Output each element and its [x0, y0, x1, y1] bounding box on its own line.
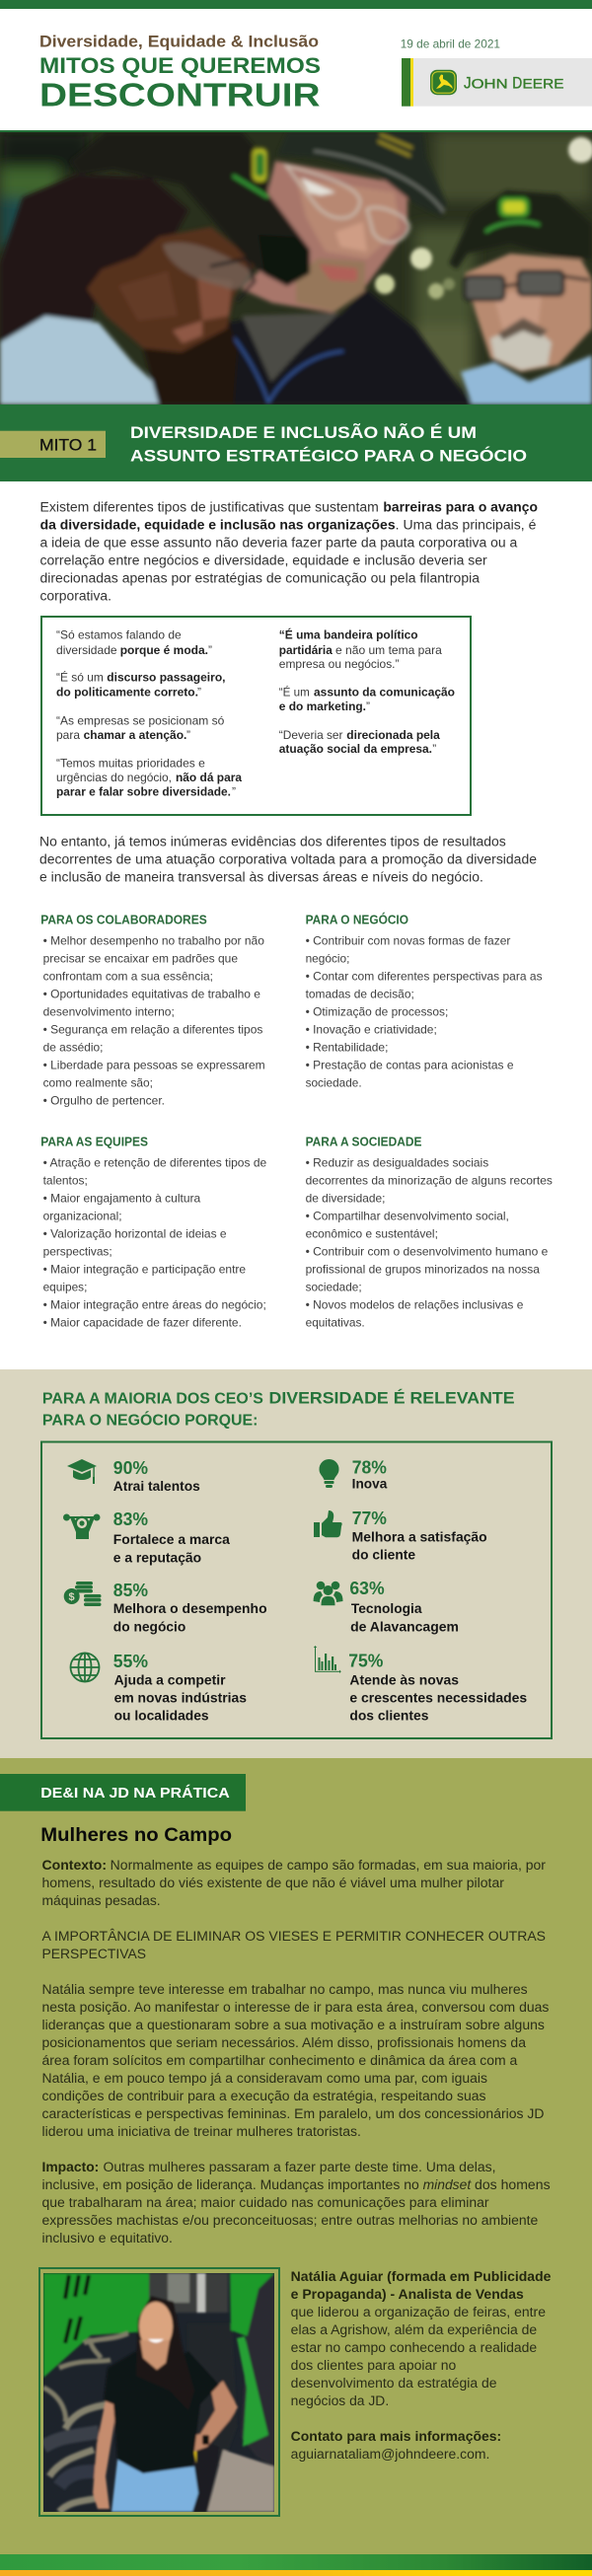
list: para as equipes: • Maior engajamento à cultura	[43, 1192, 201, 1206]
list: para as equipes: • Valorização horizontal de ideias e	[43, 1227, 227, 1241]
black polo	[104, 2351, 219, 2473]
list: para os colaboradores: como realmente são;	[43, 1076, 153, 1090]
story paragraph: posicionamentos que seriam necessários. Além disso, profissionais homens da	[41, 2035, 526, 2050]
intro paragraph: da diversidade, equidade e inclusão nas organizações	[40, 517, 396, 532]
stat: 75% necessidades: dos clientes	[349, 1708, 428, 1723]
subheading	[41, 1929, 546, 1961]
panel: DE&I in practice	[0, 1758, 592, 2554]
list: para a sociedade: equitativas.	[306, 1316, 365, 1330]
stat: 55% competir: ou localidades	[114, 1708, 209, 1723]
list: para o negócio: tomadas de decisão;	[306, 988, 414, 1001]
list: para os colaboradores: confrontam com a sua essência;	[43, 970, 213, 984]
subheading: A IMPORTÂNCIA DE ELIMINAR OS VIESES E PERMITIR CONHECER OUTRAS	[41, 1929, 546, 1944]
stat: 55% competir: Ajuda a competir	[114, 1672, 226, 1687]
profile text: dos clientes para apoiar no	[291, 2358, 456, 2373]
list: para o negócio: • Rentabilidade;	[306, 1041, 388, 1055]
list: para as equipes	[40, 1136, 267, 1330]
header title block	[39, 34, 321, 113]
man in centre: cap	[277, 132, 447, 217]
left arm	[93, 2400, 117, 2509]
impact paragraph: expressões machistas e/ou preconceituosas; entre outras melhorias no ambiente	[41, 2213, 538, 2228]
hair	[136, 2296, 194, 2410]
subheading: PERSPECTIVAS	[41, 1947, 146, 1961]
safety glasses	[286, 166, 409, 243]
quotes column 2: direcionada pela	[346, 728, 440, 742]
quotes column 1: “Só estamos falando de	[56, 628, 182, 642]
section heading: DIVERSIDADE É RELEVANTE	[268, 1388, 515, 1407]
profile text: estar no campo conhecendo a realidade	[291, 2340, 537, 2355]
stat: 83% marca: e a reputação	[113, 1550, 201, 1565]
context paragraph: Contexto:	[41, 1858, 107, 1873]
icon: globe	[71, 1654, 99, 1681]
list: para a sociedade: • Compartilhar desenvolvimento social,	[306, 1210, 509, 1223]
myth number tab	[0, 431, 106, 458]
story paragraph: características e perspectivas femininas. Em paralelo, um dos concessionários JD	[41, 2106, 545, 2121]
stat: 55% competir: em novas indústrias	[114, 1690, 247, 1705]
quotes box	[41, 617, 471, 815]
quotes column 1: ”	[186, 728, 190, 742]
profile text: desenvolvimento da estratégia de	[291, 2376, 497, 2391]
list: para o negócio: sociedade.	[306, 1076, 362, 1090]
stat: 63% tecnologia: 63%	[349, 1579, 385, 1598]
list: para o negócio: negócio;	[306, 952, 349, 966]
myth heading	[130, 422, 527, 465]
list: para o negócio: • Otimização de processos;	[306, 1005, 448, 1019]
header divider	[0, 130, 592, 132]
floor	[207, 2450, 274, 2512]
quotes column 1: não dá para	[176, 771, 242, 784]
icon: leaping deer shield	[430, 70, 457, 95]
yellow strip	[191, 2450, 199, 2465]
list: para os colaboradores: • Orgulho de pertencer.	[43, 1094, 165, 1108]
date: 19 de abril de 2021	[401, 37, 500, 50]
list: para o negócio: • Contribuir com novas formas de fazer	[306, 934, 510, 948]
list: para as equipes: equipes;	[43, 1281, 87, 1294]
list: para a sociedade: econômico e sustentável;	[306, 1227, 438, 1241]
header kicker: Diversidade, Equidade & Inclusão	[39, 34, 319, 51]
quotes column 2: ”	[432, 742, 436, 756]
icon: thumbs up	[314, 1510, 342, 1537]
icon: coins: $	[69, 1591, 75, 1603]
quotes column 2: assunto da comunicação	[314, 686, 455, 699]
green ladder	[237, 2336, 268, 2447]
left tire treads	[43, 2333, 128, 2422]
tractor hood	[43, 2273, 149, 2378]
story paragraph: condições de contribuir para a execução da estratégia, respeitando suas	[41, 2089, 486, 2103]
stat: 77% satisfacao	[314, 1509, 487, 1562]
stat: 90% atrai talentos: Atrai talentos	[113, 1479, 200, 1494]
stat: 78% inova: Inova	[352, 1476, 388, 1491]
section heading: PARA A MAIORIA DOS CEO’S	[42, 1390, 263, 1407]
impact paragraph: mindset	[423, 2177, 472, 2192]
quotes column 1: discurso passageiro,	[107, 671, 225, 685]
stat: 85% desempenho: do negócio	[113, 1619, 185, 1634]
evidence paragraph: decorrentes de uma atuação corporativa voltada para a promoção da diversidade	[39, 852, 537, 867]
quotes column 1: “Temos muitas prioridades e	[56, 757, 205, 771]
green title band	[0, 405, 592, 481]
list: para os colaboradores: • Melhor desempenho no trabalho por não	[43, 934, 264, 948]
myth heading: DIVERSIDADE E INCLUSÃO NÃO É UM	[130, 422, 477, 442]
main title line 2: DESCONTRUIR	[39, 77, 320, 113]
list: para a sociedade: de diversidade;	[306, 1192, 385, 1206]
section tab	[0, 1774, 246, 1811]
intro paragraph	[39, 499, 538, 603]
quotes column 1: “As empresas se posicionam só	[56, 714, 225, 728]
stat: 90% atrai talentos: 90%	[113, 1458, 148, 1478]
case heading: Mulheres no Campo	[40, 1825, 232, 1846]
list: para as equipes: • Atração e retenção de diferentes tipos de	[43, 1156, 267, 1170]
quotes column 2: “Deveria ser	[279, 728, 343, 742]
stat: 83% marca: Fortalece a marca	[113, 1532, 230, 1547]
stat: 85% desempenho	[64, 1581, 267, 1634]
icon: light bulb	[319, 1459, 339, 1488]
list: para a sociedade: • Contribuir com o desenvolvimento humano e	[306, 1245, 549, 1259]
icon: weightlifter	[63, 1513, 101, 1539]
list: para os colaboradores: de assédio;	[43, 1041, 103, 1055]
evidence paragraph: No entanto, já temos inúmeras evidências dos diferentes tipos de resultados	[39, 835, 506, 849]
context paragraph: Normalmente as equipes de campo são formadas, em sua maioria, por	[111, 1858, 547, 1873]
quotes column 1: ”	[197, 686, 201, 699]
story paragraph: nesta posição. Ao manifestar o interesse de ir para esta área, conversou com duas	[41, 2000, 550, 2015]
stats frame	[41, 1442, 552, 1738]
list: para as equipes: talentos;	[43, 1174, 88, 1188]
wordmark: OHN	[472, 76, 508, 91]
right tire	[241, 2273, 274, 2466]
face	[139, 2302, 173, 2351]
list: para o negócio: • Inovação e criatividade;	[306, 1023, 437, 1037]
list: para o negócio: PARA O NEGÓCIO	[306, 913, 408, 927]
main title line 1: MITOS QUE QUEREMOS	[39, 53, 321, 78]
context paragraph: homens, resultado do viés existente de que não é viável uma mulher pilotar	[41, 1876, 504, 1890]
stat: 55% competir: 55%	[113, 1652, 148, 1671]
list: para a sociedade: decorrentes da minorização de alguns recortes	[306, 1174, 553, 1188]
stat: 75% necessidades: 75%	[348, 1651, 383, 1670]
list: para o negócio: • Prestação de contas para acionistas e	[306, 1059, 514, 1072]
intro paragraph: Existem diferentes tipos de justificativas que sustentam	[39, 499, 379, 514]
stat: 83% marca	[63, 1509, 230, 1565]
man in centre: face	[242, 161, 407, 313]
profile text: que liderou a organização de feiras, entre	[291, 2305, 546, 2319]
section tab: DE&I NA JD NA PRÁTICA	[40, 1785, 230, 1802]
evidence paragraph: e inclusão de maneira transversal às diversas áreas e níveis do negócio.	[39, 870, 483, 885]
quotes column 1: chamar a atenção.	[84, 728, 186, 742]
woman: cap	[70, 132, 310, 286]
impact paragraph: Outras mulheres passaram a fazer parte deste time. Uma delas,	[103, 2160, 495, 2174]
story paragraph: área foram solícitos em compartilhar conhecimento e dinâmica da área com a	[41, 2053, 518, 2068]
profile text: Contato para mais informações:	[291, 2429, 501, 2444]
list: para os colaboradores: precisar se encaixar em padrões que	[43, 952, 238, 966]
stat: 77% satisfacao: 77%	[352, 1509, 387, 1528]
stat: 63% tecnologia	[314, 1579, 459, 1634]
right arm	[191, 2380, 239, 2453]
quotes column 1: diversidade	[56, 643, 117, 657]
footer bars	[0, 2554, 592, 2576]
context paragraph: máquinas pesadas.	[41, 1893, 161, 1908]
panel: CEO reasons	[0, 1369, 592, 1758]
man in centre: jacket	[227, 289, 472, 405]
woman: shirt	[0, 316, 178, 405]
stat: 90% atrai talentos	[67, 1458, 200, 1494]
list: para os colaboradores: • Liberdade para pessoas se expressarem	[43, 1059, 265, 1072]
wordmark: J	[464, 74, 472, 92]
quotes column 2: empresa ou negócios.”	[279, 657, 399, 671]
impact paragraph: que trabalharam na área; maior cuidado nas comunicações para eliminar	[41, 2195, 489, 2210]
icon: graduation cap	[67, 1459, 97, 1484]
list: para as equipes: organizacional;	[43, 1210, 122, 1223]
icon: bar chart	[314, 1646, 341, 1673]
right fender	[230, 2273, 274, 2336]
quotes column 2: “É um	[279, 685, 310, 699]
intro paragraph: a ideia de que esse assunto não deveria fazer parte da pauta corporativa ou a	[39, 535, 518, 550]
man at right: beard	[490, 323, 552, 370]
list: para a sociedade: PARA A SOCIEDADE	[306, 1136, 422, 1149]
man at right: face	[465, 254, 592, 372]
framed photo: Natália in front of tractor	[39, 2268, 279, 2516]
list: para as equipes: • Maior integração e participação entre	[43, 1263, 246, 1277]
impact paragraph: inclusivo e equitativo.	[41, 2231, 173, 2245]
list: para a sociedade	[306, 1136, 553, 1330]
intro paragraph: . Uma das principais, é	[396, 517, 536, 532]
stat: 77% satisfacao: do cliente	[352, 1547, 415, 1562]
profile text	[291, 2269, 552, 2462]
list: para os colaboradores: PARA OS COLABORADORES	[40, 914, 207, 927]
stat: 85% desempenho: Melhora o desempenho	[113, 1601, 267, 1616]
man at right: cap	[449, 190, 592, 269]
story paragraph: Natália, e em pouco tempo já a consideravam como uma par, com iguais	[41, 2071, 487, 2086]
stat: 63% tecnologia: de Alavancagem	[350, 1619, 459, 1634]
quotes column 1: ”	[208, 643, 212, 657]
list: para o negócio	[306, 913, 543, 1090]
story paragraph: liderou uma iniciativa de treinar mulheres tratoristas.	[41, 2124, 361, 2139]
stat: 78% inova	[319, 1457, 388, 1491]
quotes column 2	[279, 627, 455, 756]
stat: 77% satisfacao: Melhora a satisfação	[352, 1529, 487, 1544]
story paragraph: Natália sempre teve interesse em trabalhar no campo, mas nunca viu mulheres	[41, 1982, 528, 1997]
list: para a sociedade: • Novos modelos de relações inclusivas e	[306, 1298, 524, 1312]
list: para os colaboradores: • Oportunidades equitativas de trabalho e	[43, 988, 260, 1001]
quotes column 1: parar e falar sobre diversidade.	[56, 785, 231, 799]
icon: group of people	[314, 1582, 343, 1605]
cab	[149, 2273, 228, 2313]
wordmark: D	[512, 74, 522, 92]
impact paragraph: inclusive, em posição de liderança. Mudanças importantes no	[41, 2177, 419, 2192]
hero photo: three John Deere workers wearing caps	[0, 132, 592, 405]
stat: 78% inova: 78%	[352, 1457, 387, 1477]
man at right: glasses	[465, 271, 563, 300]
quotes column 1: urgências do negócio,	[56, 771, 172, 784]
intro paragraph: direcionadas apenas por estratégias de comunicação ou pela filantropia	[39, 570, 481, 585]
list: para os colaboradores: desenvolvimento interno;	[43, 1005, 175, 1019]
quotes column 2: e não um tema para	[335, 643, 442, 657]
intro paragraph: barreiras para o avanço	[383, 499, 538, 514]
quotes column 1: “É só um	[56, 670, 104, 685]
wordmark: EERE	[523, 76, 564, 91]
quotes column 2: partidária	[279, 643, 333, 657]
profile text: aguiarnataliam@johndeere.com.	[291, 2447, 489, 2462]
quotes column 1	[56, 628, 242, 799]
list: para as equipes: • Maior integração entre áreas do negócio;	[43, 1298, 266, 1312]
intro paragraph: corporativa.	[39, 588, 111, 603]
profile text: Natália Aguiar (formada em Publicidade	[291, 2269, 552, 2284]
stat: 55% competir	[71, 1652, 247, 1723]
woman: hair	[0, 175, 188, 348]
icon: coins	[64, 1582, 101, 1606]
list: para as equipes: PARA AS EQUIPES	[40, 1136, 148, 1149]
section heading: PARA O NEGÓCIO PORQUE:	[42, 1410, 258, 1429]
man at right: shirt	[461, 355, 592, 405]
quotes column 2: ”	[366, 699, 370, 713]
list: para a sociedade: • Reduzir as desigualdades sociais	[306, 1156, 488, 1170]
quotes column 2: atuação social da empresa.	[279, 742, 432, 756]
wordmark	[464, 74, 564, 92]
woman: glasses	[163, 243, 252, 289]
impact paragraph: dos homens	[475, 2177, 551, 2192]
list: para a sociedade: profissional de grupos minorizados na nossa	[306, 1263, 540, 1277]
list: para a sociedade: sociedade;	[306, 1281, 362, 1294]
story paragraph: lideranças que a questionaram sobre a sua motivação e a instruíram sobre alguns	[41, 2018, 545, 2032]
myth number tab: MITO 1	[39, 436, 97, 455]
quotes column 2: “É uma bandeira político	[279, 627, 418, 642]
list: para o negócio: • Contar com diferentes perspectivas para as	[306, 970, 543, 984]
impact paragraph: Impacto:	[41, 2160, 99, 2174]
stat: 63% tecnologia: Tecnologia	[351, 1601, 422, 1616]
myth heading: ASSUNTO ESTRATÉGICO PARA O NEGÓCIO	[130, 446, 527, 465]
jeans	[111, 2460, 198, 2512]
profile text: negócios da JD.	[291, 2393, 389, 2408]
section heading	[42, 1388, 515, 1429]
story paragraph	[41, 1982, 550, 2139]
stat: 83% marca: 83%	[113, 1509, 148, 1529]
quotes column 1: porque é moda.	[120, 643, 208, 657]
profile text: e Propaganda) - Analista de Vendas	[291, 2287, 524, 2302]
evidence paragraph	[39, 835, 537, 885]
woman: lower hair	[142, 328, 237, 405]
list: para os colaboradores	[40, 914, 265, 1108]
quotes column 1: para	[56, 728, 80, 742]
tractor body	[187, 2323, 237, 2466]
stat: 75% necessidades: e crescentes necessidades	[349, 1690, 527, 1705]
stat: 75% necessidades: Atende às novas	[349, 1672, 459, 1687]
woman: face	[87, 227, 257, 352]
list: para os colaboradores: • Segurança em relação a diferentes tipos	[43, 1023, 262, 1037]
stat: 85% desempenho: 85%	[113, 1581, 148, 1600]
top green bar	[0, 0, 592, 9]
profile text: elas a Agrishow, além da experiência de	[291, 2322, 537, 2337]
intro paragraph: correlação entre negócios e diversidade, equidade e inclusão deveria ser	[39, 552, 487, 567]
quotes column 2: e do marketing.	[279, 699, 366, 713]
quotes column 1: do politicamente correto.	[56, 686, 198, 699]
list: para as equipes: • Maior capacidade de fazer diferente.	[43, 1316, 242, 1330]
impact paragraph	[41, 2160, 551, 2245]
John Deere logo strip	[402, 58, 592, 107]
stat: 75% necessidades	[314, 1646, 527, 1723]
quotes column 1: ”	[232, 785, 236, 799]
list: para as equipes: perspectivas;	[43, 1245, 112, 1259]
context paragraph	[41, 1858, 547, 1908]
